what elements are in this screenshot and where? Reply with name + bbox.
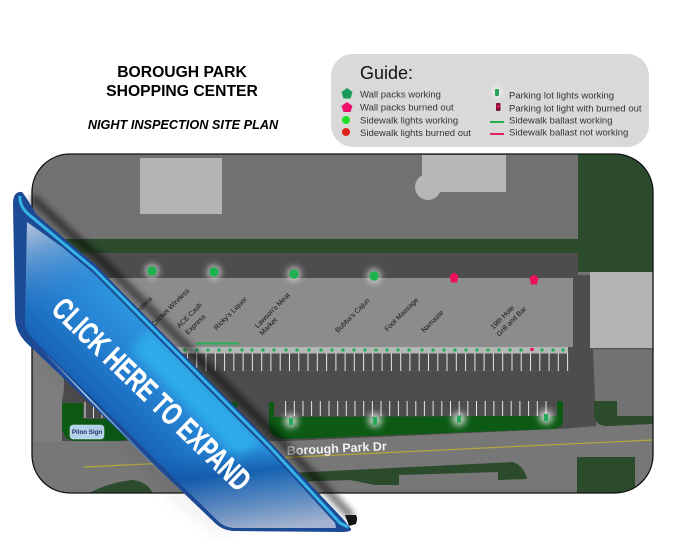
parking stripes north row (178, 353, 568, 371)
icon: wall pack burned out (342, 102, 352, 112)
parking light glows (284, 410, 553, 428)
ribbon face (25, 222, 336, 528)
title: SHOPPING CENTER (106, 83, 258, 100)
road label: Borough Park Dr (286, 439, 387, 458)
icon: parking light working (492, 87, 502, 97)
store labels: Express (185, 313, 208, 336)
south medians (87, 457, 635, 494)
pilon sign: Pilon Sign (72, 429, 102, 436)
sidewalk ballast working (196, 342, 239, 344)
rear landscaping (64, 154, 653, 272)
parking lot lights (289, 414, 548, 425)
ribbon bright centre (130, 330, 260, 462)
wall pack glows (145, 264, 381, 283)
legend labels: Sidewalk ballast working (509, 116, 612, 126)
icon: sidewalk light burned out (342, 128, 350, 136)
ribbon body outline (13, 192, 351, 532)
building: east building (590, 272, 653, 348)
icon: wall pack working (342, 88, 352, 98)
ribbon top fade (26, 222, 90, 300)
wall packs burned out (450, 272, 538, 284)
legend labels: Sidewalk ballast not working (509, 128, 628, 138)
road surface (294, 429, 558, 441)
store labels: Grill and Bar (496, 305, 529, 338)
sidewalk lights (183, 348, 565, 352)
road centre line (84, 440, 653, 467)
store labels: Namaste (421, 309, 445, 334)
title: BOROUGH PARK (117, 64, 247, 81)
east lot edge (590, 348, 653, 350)
parking lot asphalt (62, 253, 596, 441)
shopping center building (64, 278, 573, 347)
ribbon shading (20, 215, 345, 532)
panel: site plan map (32, 154, 653, 494)
front lawn (269, 401, 563, 439)
icon: ballast working (490, 121, 504, 123)
legend labels: Parking lot light with burned out (509, 104, 642, 114)
ribbon lower highlight edge (40, 348, 170, 482)
pilon sign (70, 425, 104, 439)
icon: sidewalk light working (342, 116, 350, 124)
wall packs working (147, 266, 379, 281)
ribbon: click here to expand (13, 192, 351, 532)
store labels (132, 287, 529, 338)
legend labels: Wall packs working (360, 90, 441, 100)
title (106, 64, 258, 100)
store labels: Lawson's Meat (254, 292, 292, 330)
burned out sidewalk light (530, 348, 534, 351)
store labels: Foot Massage (384, 297, 420, 333)
sidewalk strip (176, 347, 568, 354)
icon: ballast not working (490, 133, 504, 135)
building: north outbuilding (140, 158, 222, 214)
parking stripes south row (85, 401, 546, 418)
store labels: Bubba's Cajun (334, 297, 372, 334)
building: north-east outbuilding (415, 155, 506, 200)
icon: parking light burned out (496, 103, 500, 111)
store labels: 19th Hole (490, 305, 516, 331)
store labels: Cricket Wireless (151, 287, 192, 328)
west verge (33, 350, 64, 442)
subtitle: NIGHT INSPECTION SITE PLAN (88, 118, 279, 132)
ribbon shadow (32, 197, 357, 532)
panel: guide legend (331, 54, 649, 147)
legend labels (360, 90, 642, 139)
west lawn (62, 402, 237, 441)
ribbon bottom fade (169, 449, 336, 528)
store labels: ACE Cash (176, 302, 204, 330)
legend labels: Wall packs burned out (360, 102, 454, 114)
legend labels: Sidewalk lights working (360, 116, 458, 126)
ribbon upper highlight edge (20, 196, 348, 527)
legend labels: Parking lot lights working (509, 90, 614, 102)
store labels: Market (259, 317, 279, 337)
store labels: Pizzeria (132, 296, 154, 318)
legend labels: Sidewalk lights burned out (360, 128, 471, 139)
legend heading: Guide: (360, 63, 413, 83)
east median (594, 401, 653, 426)
map outline (32, 154, 653, 493)
store labels: Ricky's Liquor (213, 296, 249, 332)
